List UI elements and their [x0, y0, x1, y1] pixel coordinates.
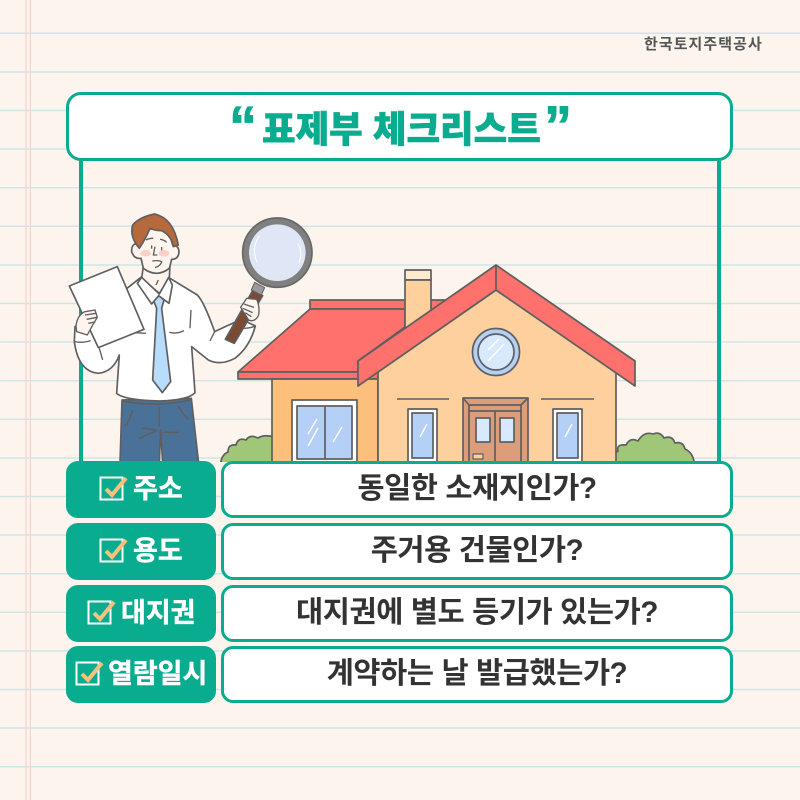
- closing quote: ”: [544, 94, 572, 157]
- head: [132, 228, 179, 285]
- eyebrow lines: [397, 398, 594, 400]
- row 2 label: use: [66, 523, 216, 580]
- row 3 question: 대지권에 별도 등기가 있는가?: [296, 596, 658, 629]
- opening quote: “: [229, 94, 257, 157]
- paper hand: [76, 310, 97, 335]
- organization name: 한국토지주택공사: [644, 36, 763, 53]
- chimney: [405, 270, 431, 330]
- neck: [142, 265, 170, 293]
- side window left: [408, 409, 437, 469]
- hair: [132, 214, 178, 248]
- title text: 표제부 체크리스트: [262, 109, 541, 150]
- icon: checkbox: [100, 538, 128, 562]
- icon: left bush: [220, 434, 272, 462]
- row 1 question: [221, 461, 733, 518]
- paper: [69, 267, 144, 348]
- row 2 question: [221, 523, 733, 580]
- row 3 label: land rights: 대지권: [121, 598, 196, 628]
- magnifier: [225, 218, 312, 343]
- row 1 label: address: [66, 461, 216, 518]
- row 1 question: 동일한 소재지인가?: [357, 472, 597, 505]
- magnifier hand: [241, 298, 259, 321]
- main wall: [378, 290, 616, 470]
- row 4 question: [221, 646, 733, 703]
- row 3 question: [221, 585, 733, 642]
- front door: [463, 398, 528, 470]
- side window right: [553, 409, 582, 469]
- icon: right bush: [616, 432, 695, 461]
- icon: checkbox: [100, 476, 128, 500]
- left wing window: [292, 400, 357, 470]
- row 4 question: 계약하는 날 발급했는가?: [327, 657, 627, 690]
- illustration frame: [79, 150, 721, 465]
- row 4 label: viewing date: 열람일시: [108, 659, 207, 689]
- left wing roof: [238, 300, 445, 379]
- row 2 label: use: 용도: [133, 536, 183, 566]
- icon: checkbox: [76, 662, 104, 686]
- round window: [472, 328, 520, 376]
- row 3 label: land rights: [66, 585, 216, 642]
- trousers: [120, 398, 199, 463]
- person: [69, 214, 312, 463]
- house: [238, 265, 635, 470]
- row 1 label: address: 주소: [133, 474, 183, 504]
- main gable roof: [358, 265, 635, 386]
- row 4 label: viewing date: [66, 646, 216, 703]
- illustration: house and inspector: [68, 213, 695, 462]
- title box: [66, 92, 733, 161]
- icon: checkbox: [88, 600, 116, 624]
- shirt: [74, 277, 255, 401]
- tie: [153, 296, 171, 393]
- row 2 question: 주거용 건물인가?: [371, 534, 583, 567]
- left wing wall: [272, 379, 378, 469]
- collar: [137, 277, 172, 304]
- shirt details: [75, 310, 255, 360]
